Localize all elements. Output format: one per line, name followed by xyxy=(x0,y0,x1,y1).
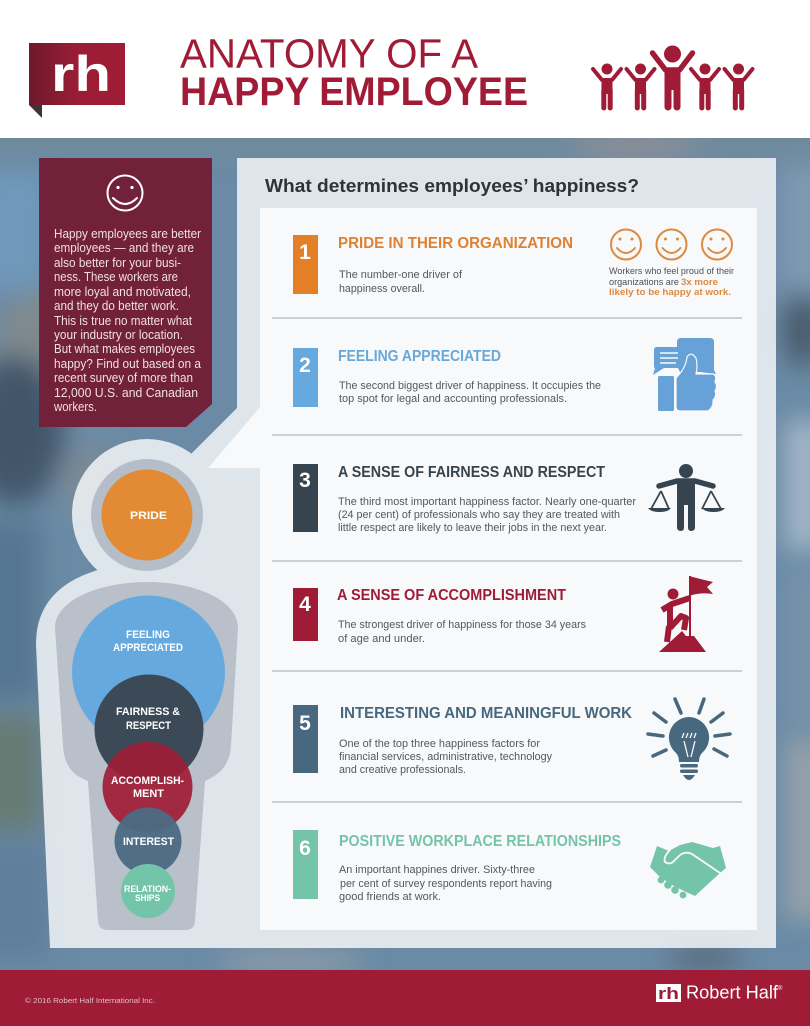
callout: 3x more likely: Workers who feel proud of their xyxy=(609,266,734,277)
row 1: pride in their organization: happiness overall. xyxy=(339,283,425,295)
intro paragraph xyxy=(53,227,201,414)
translucent panel and employee silhouette xyxy=(36,158,776,948)
icon: three smileys xyxy=(611,230,732,260)
intro paragraph: Happy employees are better xyxy=(54,227,201,241)
row 4: sense of accomplishment: A SENSE OF ACCOMPLISHMENT xyxy=(337,587,566,604)
footer bar xyxy=(0,970,810,1026)
row 5: interesting and meaningful work xyxy=(293,705,632,776)
intro paragraph: ness. These workers are xyxy=(54,270,178,284)
circle: interest: INTEREST xyxy=(123,836,174,848)
row 4: sense of accomplishment: of age and under. xyxy=(338,633,425,645)
copyright text: © 2016 Robert Half International Inc. xyxy=(25,996,155,1005)
circle: accomplishment: ACCOMPLISH- xyxy=(111,775,184,787)
logo: rh speech bubble: rh xyxy=(51,46,111,102)
row 3: sense of fairness and respect: 3 xyxy=(299,469,311,492)
callout: 3x more likely: 3x more xyxy=(681,277,718,288)
row 2: feeling appreciated: The second biggest driver of happiness. It occupies the xyxy=(339,380,601,392)
icon: group of cheering people xyxy=(593,46,752,108)
title: HAPPY EMPLOYEE xyxy=(180,70,528,114)
circle: feeling appreciated xyxy=(72,596,225,748)
row 5: interesting and meaningful work: One of the top three happiness factors for xyxy=(339,738,540,750)
icon: light bulb xyxy=(648,699,730,780)
header background xyxy=(0,0,810,138)
row 5: interesting and meaningful work: financial services, administrative, technology xyxy=(339,751,552,763)
circle: relationships: RELATION- xyxy=(124,884,171,895)
circle: pride: PRIDE xyxy=(130,510,167,522)
white content panel with pointer xyxy=(208,208,757,930)
circle: fairness and respect xyxy=(94,674,204,784)
circle: interest xyxy=(114,808,182,874)
intro paragraph: 12,000 U.S. and Canadian xyxy=(54,386,198,400)
intro paragraph: more loyal and motivated, xyxy=(54,285,191,299)
callout: 3x more likely xyxy=(609,266,734,298)
row 1: pride in their organization xyxy=(293,235,573,295)
row 6: positive workplace relationships xyxy=(293,830,621,903)
row 4: sense of accomplishment: 4 xyxy=(299,593,311,616)
row 2: feeling appreciated: FEELING APPRECIATED xyxy=(338,348,501,365)
row 2: feeling appreciated xyxy=(293,348,601,407)
circle: feeling appreciated: APPRECIATED xyxy=(113,642,183,654)
intro paragraph: employees — and they are xyxy=(54,241,194,255)
circle: pride xyxy=(102,470,192,560)
body diagram xyxy=(55,459,238,930)
circle: accomplishment xyxy=(102,742,192,832)
intro paragraph: But what makes employees xyxy=(54,342,195,356)
circle: relationships: SHIPS xyxy=(135,893,160,904)
icon: person balancing scales xyxy=(648,464,725,531)
row 3: sense of fairness and respect xyxy=(293,464,636,534)
icon: thumbs up with speech bubbles xyxy=(653,338,716,411)
title: ANATOMY OF A xyxy=(180,30,479,76)
logo: rh speech bubble xyxy=(29,43,125,118)
circle: fairness and respect: RESPECT xyxy=(126,720,171,732)
footer logo: Robert Half: Robert Half xyxy=(686,982,779,1002)
icon: climber with flag xyxy=(659,576,713,652)
grey body xyxy=(55,582,238,930)
panel: intro text xyxy=(39,158,212,427)
row 1: pride in their organization: 1 xyxy=(299,241,311,264)
row 1: pride in their organization: PRIDE IN THEIR ORGANIZATION xyxy=(338,235,573,252)
circle: relationships xyxy=(121,864,175,918)
intro paragraph: also better for your busi- xyxy=(54,256,181,270)
grey head ring xyxy=(91,459,203,571)
callout: 3x more likely: organizations are xyxy=(609,277,679,288)
footer logo: Robert Half xyxy=(656,982,783,1003)
row 4: sense of accomplishment xyxy=(293,587,586,645)
intro paragraph: This is true no matter what xyxy=(54,314,192,328)
intro paragraph: your industry or location. xyxy=(54,328,183,342)
row 5: interesting and meaningful work: INTERESTING AND MEANINGFUL WORK xyxy=(340,705,632,722)
row 3: sense of fairness and respect: little respect are likely to leave their jobs in the next year. xyxy=(338,522,607,534)
footer logo: Robert Half: ® xyxy=(778,985,783,992)
intro paragraph: and they do better work. xyxy=(54,299,179,313)
row 3: sense of fairness and respect: A SENSE OF FAIRNESS AND RESPECT xyxy=(338,464,605,481)
row 3: sense of fairness and respect: The third most important happiness factor. Nearly one-quarter xyxy=(338,496,636,508)
circle: fairness and respect: FAIRNESS & xyxy=(116,706,180,718)
row 6: positive workplace relationships: POSITIVE WORKPLACE RELATIONSHIPS xyxy=(339,833,621,850)
row 3: sense of fairness and respect: (24 per cent) of professionals who say they are treated with xyxy=(338,509,620,521)
intro paragraph: workers. xyxy=(53,400,97,414)
callout: 3x more likely: likely to be happy at work. xyxy=(609,287,731,298)
row 1: pride in their organization: The number-one driver of xyxy=(339,269,463,281)
panel heading: What determines employees’ happiness? xyxy=(265,176,639,196)
circle: accomplishment: MENT xyxy=(133,788,164,800)
row 6: positive workplace relationships: per cent of survey respondents report having xyxy=(340,878,552,890)
row 6: positive workplace relationships: 6 xyxy=(299,837,311,860)
icon: smiley xyxy=(108,176,142,210)
row 6: positive workplace relationships: An important happines driver. Sixty-three xyxy=(339,864,535,876)
row 5: interesting and meaningful work: 5 xyxy=(299,712,311,735)
icon: handshake xyxy=(650,842,726,898)
intro paragraph: recent survey of more than xyxy=(54,371,193,385)
title xyxy=(180,30,528,114)
circle: feeling appreciated: FEELING xyxy=(126,629,170,641)
row 2: feeling appreciated: top spot for legal and accounting professionals. xyxy=(339,393,567,405)
row 6: positive workplace relationships: good friends at work. xyxy=(339,891,441,903)
row 4: sense of accomplishment: The strongest driver of happiness for those 34 years xyxy=(338,619,586,631)
row 5: interesting and meaningful work: and creative professionals. xyxy=(339,764,466,776)
row 2: feeling appreciated: 2 xyxy=(299,354,311,377)
footer logo: Robert Half: rh xyxy=(658,984,679,1003)
intro paragraph: happy? Find out based on a xyxy=(54,357,201,371)
